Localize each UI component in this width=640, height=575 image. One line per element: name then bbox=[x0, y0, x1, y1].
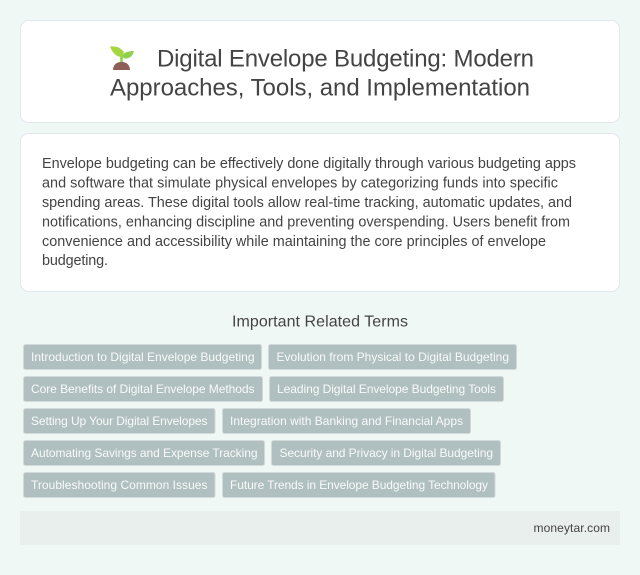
tag: Setting Up Your Digital Envelopes bbox=[31, 414, 208, 428]
panel: description: convenience and accessibility while maintaining the core principles of envelope bbox=[42, 234, 546, 250]
tag bbox=[24, 376, 262, 402]
tag bbox=[24, 472, 215, 498]
panel: description: notifications, enhancing discipline and preventing overspending. Users benefit from bbox=[42, 214, 570, 230]
tag: Automating Savings and Expense Tracking bbox=[31, 446, 258, 460]
tag bbox=[270, 376, 504, 402]
panel: description: Envelope budgeting can be effectively done digitally through various budgeting apps bbox=[42, 156, 576, 172]
panel: description: and software that simulate physical envelopes by categorizing funds into specific bbox=[42, 176, 558, 192]
tag bbox=[24, 344, 262, 370]
title bbox=[110, 46, 534, 102]
tag bbox=[272, 440, 500, 466]
tag: Future Trends in Envelope Budgeting Technology bbox=[230, 478, 488, 492]
tag: Troubleshooting Common Issues bbox=[31, 478, 208, 492]
tag: Core Benefits of Digital Envelope Methods bbox=[31, 382, 254, 396]
tag bbox=[222, 408, 470, 434]
footer: moneytar.com bbox=[534, 521, 610, 535]
tag group: related terms bbox=[24, 344, 516, 498]
panel: description bbox=[20, 134, 620, 292]
tag: Leading Digital Envelope Budgeting Tools bbox=[277, 382, 496, 396]
title: Digital Envelope Budgeting: Modern bbox=[157, 46, 534, 72]
heading: related terms: Important Related Terms bbox=[232, 314, 408, 330]
tag bbox=[24, 440, 264, 466]
icon: seedling bbox=[110, 46, 134, 70]
tag bbox=[24, 408, 215, 434]
panel: description: budgeting. bbox=[42, 253, 108, 269]
tag bbox=[222, 472, 495, 498]
panel: title card bbox=[20, 20, 620, 122]
panel: description: spending areas. These digital tools allow real-time tracking, automatic updates, and bbox=[42, 195, 572, 211]
tag bbox=[268, 344, 516, 370]
tag: Evolution from Physical to Digital Budgeting bbox=[276, 350, 509, 364]
tag: Introduction to Digital Envelope Budgeting bbox=[31, 350, 254, 364]
tag: Security and Privacy in Digital Budgeting bbox=[280, 446, 493, 460]
footer bbox=[20, 511, 620, 545]
title: Approaches, Tools, and Implementation bbox=[110, 74, 530, 102]
tag: Integration with Banking and Financial Apps bbox=[230, 414, 463, 428]
